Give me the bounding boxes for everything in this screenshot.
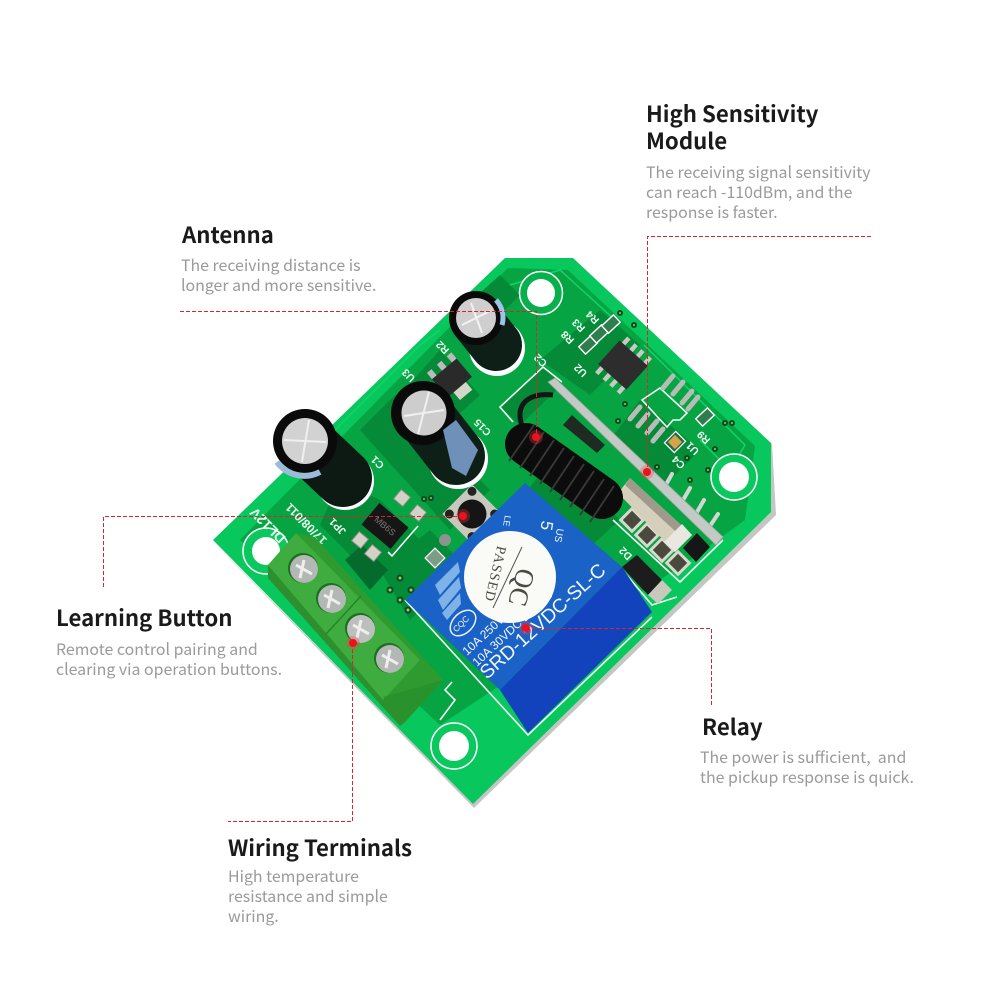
solder pads — [630, 376, 698, 441]
silkscreen labels: R4 — [584, 308, 602, 326]
silkscreen labels: DL12V — [246, 504, 289, 547]
resistors R8 R3 R4 — [579, 315, 714, 426]
silkscreen labels: C1 — [369, 453, 387, 471]
callout line: wiring terminals — [228, 643, 352, 822]
text block: high sensitivity module: can reach -110dBm, and the — [646, 180, 853, 203]
relay top face — [405, 483, 622, 690]
copper pour darker area — [240, 268, 755, 725]
board edge shadow — [212, 443, 776, 808]
metal crystal can — [618, 478, 692, 552]
receiver module header pins — [664, 474, 718, 526]
silkscreen labels: R9 — [695, 428, 713, 446]
light silk and pad accents — [335, 270, 745, 470]
text block: relay: the pickup response is quick. — [700, 765, 914, 788]
relay side face — [500, 567, 652, 733]
callout line: learning button — [104, 516, 463, 587]
marker: learning button — [456, 509, 470, 523]
relay ratings: 10A 30VDC 28VDC — [469, 587, 556, 669]
board base — [213, 258, 771, 804]
text block: antenna: Antenna — [181, 218, 274, 250]
text block: high sensitivity module — [646, 97, 871, 223]
terminal divide — [326, 596, 361, 634]
silkscreen labels: U3 — [400, 366, 418, 384]
mounting hole bottom — [431, 723, 477, 769]
dark traces — [320, 275, 700, 620]
white silkscreen outlines — [388, 367, 723, 735]
antenna coil — [509, 425, 614, 522]
silkscreen labels: U2 — [572, 361, 590, 379]
callout line: relay — [526, 628, 712, 707]
silkscreen labels: D2 — [617, 544, 635, 562]
text block: wiring terminals — [228, 831, 412, 927]
module black header — [563, 415, 605, 453]
text block: high sensitivity module: High Sensitivity — [646, 97, 819, 129]
small components near button — [425, 534, 451, 568]
text block: high sensitivity module: response is faster. — [646, 200, 778, 223]
silkscreen labels: R3 — [570, 316, 588, 334]
mounting hole right — [711, 454, 757, 500]
silkscreen labels: R2 — [434, 338, 452, 356]
voltage regulator U3 — [427, 352, 478, 405]
tantalum capacitor C4 — [664, 431, 686, 453]
capacitor C3 left — [273, 409, 374, 510]
text block: learning button: Learning Button — [56, 601, 232, 633]
relay CQC mark — [445, 605, 481, 641]
silkscreen labels: 17/08/011 — [282, 500, 330, 547]
silkscreen labels: C4 — [670, 453, 688, 471]
text block: relay: The power is sufficient, and — [700, 745, 906, 768]
relay QC sticker: QC — [502, 565, 541, 609]
vias — [388, 311, 734, 612]
terminal rear ridge — [296, 533, 443, 722]
capacitor C2 centre — [391, 381, 488, 489]
silkscreen labels: U1 — [684, 439, 702, 457]
relay CQC mark: CQC — [451, 614, 471, 634]
relay 5 US mark: 5 — [536, 519, 557, 532]
terminal screws — [288, 553, 404, 673]
text block: learning button: clearing via operation buttons. — [56, 657, 282, 680]
capacitor C1 top — [449, 291, 525, 376]
antenna wire loop — [520, 395, 553, 432]
silkscreen labels: JP1 — [327, 515, 349, 537]
text block: learning button: Remote control pairing and — [56, 637, 258, 660]
text block: wiring terminals: High temperature — [228, 864, 359, 887]
module silver edge strip — [548, 378, 723, 545]
silkscreen labels: C2 — [532, 351, 550, 369]
rectifier chip — [352, 490, 426, 561]
text block: relay — [700, 710, 914, 788]
relay ratings: 10A 250VAC 125VAC — [459, 569, 553, 658]
text block: wiring terminals: Wiring Terminals — [228, 831, 412, 863]
relay 5 US mark: US — [552, 527, 565, 543]
terminal top face — [268, 533, 420, 700]
terminal front face — [268, 565, 405, 726]
marker: antenna — [529, 430, 543, 444]
text block: high sensitivity module: Module — [646, 124, 727, 156]
circuit board photo illustration — [212, 258, 776, 808]
dark pad region near terminal — [345, 545, 388, 590]
learning push button — [442, 484, 502, 544]
callout line: high sensitivity module — [648, 236, 871, 472]
marker: wiring terminals — [346, 636, 360, 650]
silkscreen labels: R8 — [559, 328, 577, 346]
terminal block — [268, 533, 443, 726]
silkscreen labels — [246, 308, 713, 562]
text block: high sensitivity module: The receiving signal sensitivity — [646, 160, 871, 183]
text block: learning button — [56, 601, 282, 680]
mounting hole top — [520, 272, 562, 314]
relay ratings: SRD-12VDC-SL-C — [476, 559, 610, 684]
relay — [405, 483, 652, 733]
relay QC sticker: PASSED — [481, 544, 508, 603]
relay 5 US mark: LE — [501, 515, 513, 527]
board pads under crystal — [621, 509, 710, 574]
power diode D2 — [622, 555, 672, 604]
callout line: antenna — [180, 312, 536, 437]
text block: wiring terminals: resistance and simple — [228, 884, 388, 907]
rectifier chip: MB6S — [372, 514, 398, 538]
text block: relay: Relay — [702, 710, 763, 742]
marker: relay — [519, 621, 533, 635]
text block: wiring terminals: wiring. — [228, 904, 279, 927]
mounting hole left — [243, 528, 289, 574]
callout lines and markers — [104, 236, 871, 822]
relay 5 US mark — [501, 515, 565, 543]
marker: high sensitivity module — [640, 465, 654, 479]
text block: antenna: The receiving distance is — [181, 253, 361, 276]
relay QC sticker — [464, 531, 556, 623]
text block: antenna — [181, 218, 376, 296]
relay logo stripes — [435, 562, 461, 620]
receiver module chip U2 — [593, 334, 653, 396]
silkscreen labels: C15 — [472, 416, 494, 438]
text block: antenna: longer and more sensitive. — [181, 273, 376, 296]
